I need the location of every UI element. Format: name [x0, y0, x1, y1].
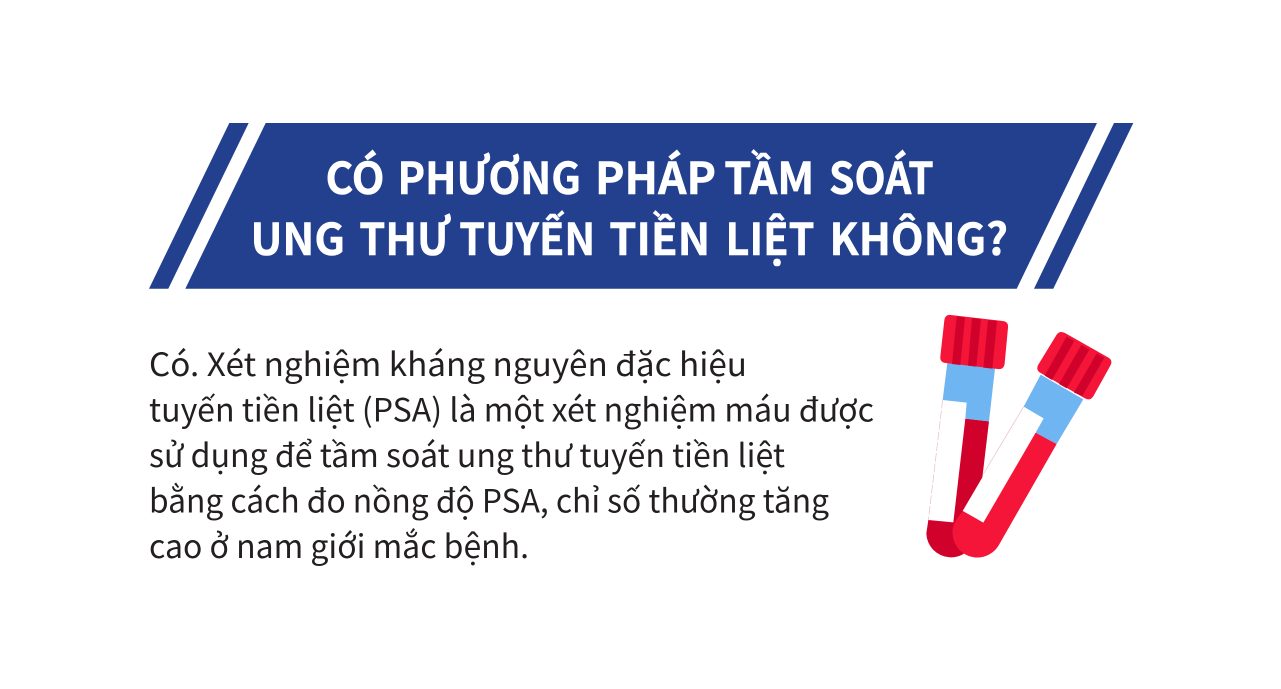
- left tube cap ridges: [952, 316, 997, 369]
- left tube: [926, 315, 1008, 557]
- banner: [149, 123, 1133, 289]
- banner left stripe: [149, 123, 249, 289]
- left tube cap: [940, 315, 1008, 369]
- banner main panel: [185, 123, 1097, 289]
- right tube: [953, 332, 1111, 557]
- body text: sử dụng để tầm soát ung thư tuyến tiền liệt: [149, 431, 785, 477]
- title: TIỀN: [609, 204, 710, 268]
- left tube edge line: [928, 400, 943, 520]
- body text: bằng cách đo nồng độ PSA, chỉ số thường tăng: [149, 476, 829, 522]
- title: SOÁT: [829, 143, 934, 207]
- right tube blood: [953, 433, 1057, 557]
- title: PHÁP: [595, 143, 716, 207]
- title: TUYẾN: [459, 204, 595, 268]
- right tube cap ridges: [1045, 337, 1104, 396]
- right tube white label: [963, 407, 1044, 523]
- left tube blood: [926, 419, 989, 557]
- title: TẦM: [724, 143, 814, 207]
- title: KHÔNG?: [830, 204, 1008, 268]
- right tube blue band: [1024, 375, 1083, 444]
- right tube edge line: [983, 407, 1024, 474]
- icon: blood test tubes: [926, 315, 1111, 557]
- body text: tuyến tiền liệt (PSA) là một xét nghiệm máu được: [149, 386, 874, 432]
- body text: cao ở nam giới mắc bệnh.: [149, 522, 529, 568]
- title: THƯ: [359, 204, 451, 268]
- title: UNG: [250, 204, 345, 268]
- title: CÓ: [326, 143, 384, 207]
- body text: Có. Xét nghiệm kháng nguyên đặc hiệu: [149, 340, 747, 386]
- banner right stripe: [1034, 123, 1133, 289]
- title: LIỆT: [726, 204, 814, 268]
- right tube cap: [1037, 332, 1111, 399]
- title: PHƯƠNG: [398, 143, 581, 207]
- left tube blue band: [943, 363, 995, 421]
- title: [250, 143, 1008, 268]
- body text: [149, 340, 874, 568]
